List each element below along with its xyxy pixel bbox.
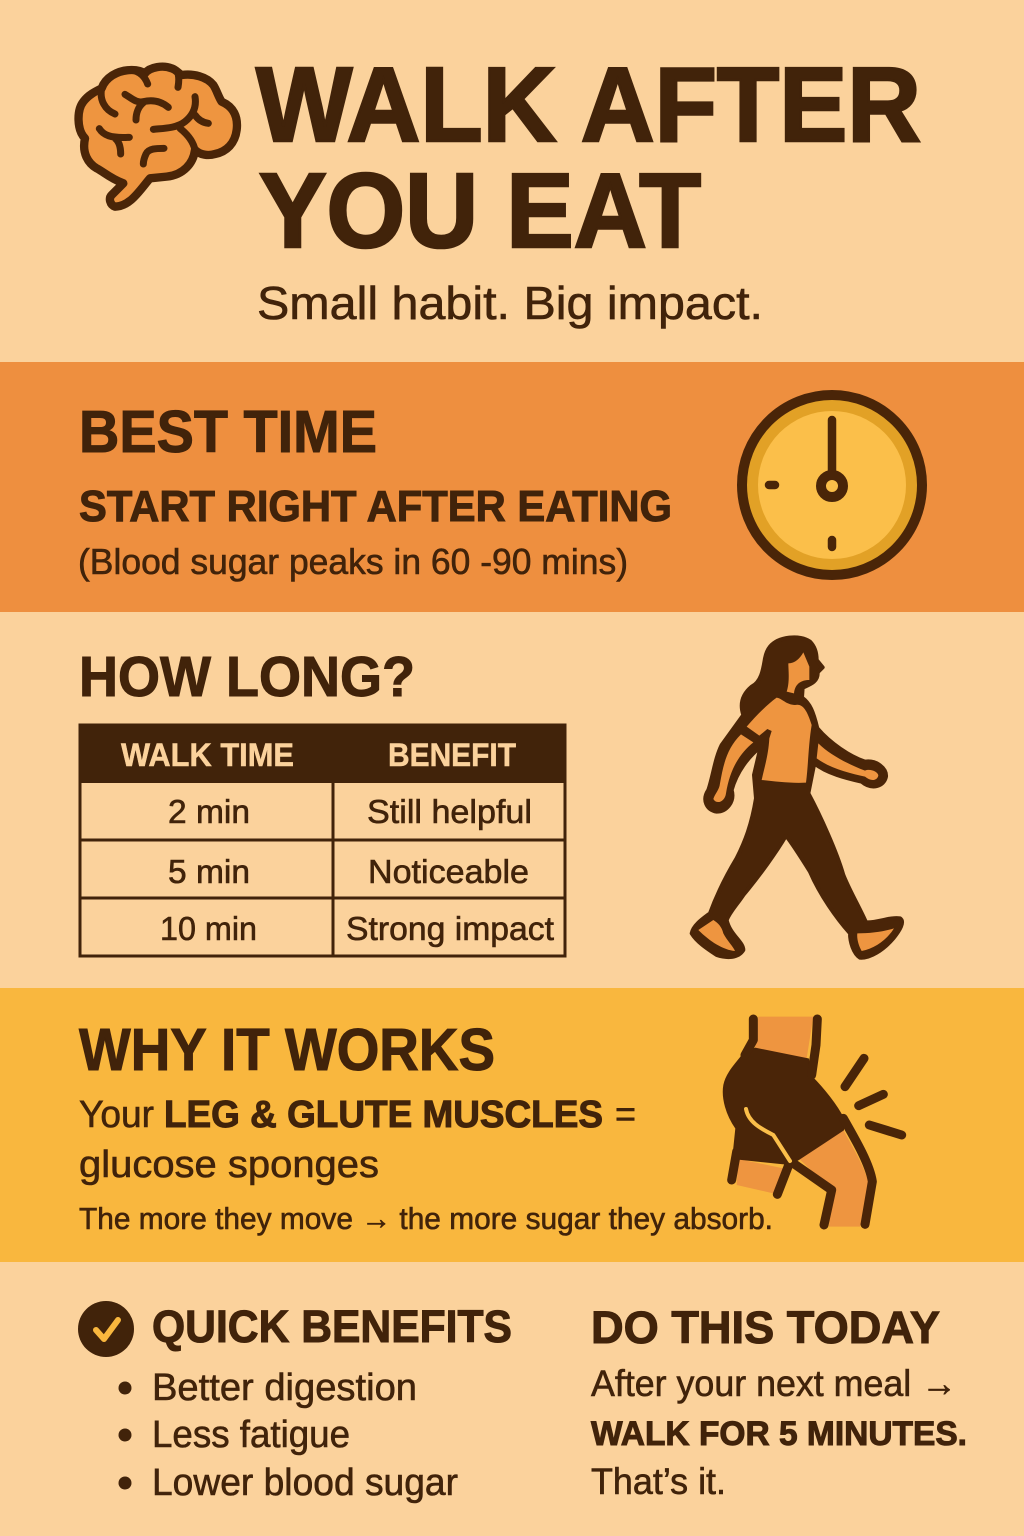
panel: best time	[0, 362, 1024, 612]
list: benefits: Better digestion	[152, 1367, 417, 1409]
heading: do this today: DO THIS TODAY	[591, 1302, 940, 1353]
table header: BENEFIT	[388, 737, 516, 773]
subtitle: Small habit. Big impact.	[257, 277, 763, 329]
text: muscles are glucose sponges: Your	[79, 1094, 154, 1136]
text: muscles are glucose sponges: LEG & GLUTE MUSCLES	[164, 1094, 603, 1136]
text: muscles are glucose sponges: =	[615, 1094, 636, 1136]
list: benefits: Lower blood sugar	[152, 1462, 458, 1504]
text: call to action	[591, 1363, 967, 1502]
icon: walking woman	[692, 637, 902, 958]
row: 2 min: Still helpful	[367, 793, 532, 830]
panel: why it works	[0, 988, 1024, 1262]
text: call to action: After your next meal →	[591, 1363, 957, 1404]
row: 5 min: Noticeable	[368, 853, 529, 890]
table header: WALK TIME	[121, 737, 294, 773]
panel: quick benefits	[78, 1301, 512, 1504]
header	[79, 46, 921, 329]
title	[256, 46, 921, 270]
row: 2 min: 2 min	[168, 793, 250, 830]
text: the more they move: The more they move → the more sugar they absorb.	[79, 1201, 773, 1236]
text: start right after eating: START RIGHT AFTER EATING	[79, 482, 672, 531]
row: 10 min: 10 min	[160, 910, 257, 947]
row: 10 min: Strong impact	[346, 910, 554, 947]
row: 10 min	[160, 910, 554, 947]
row: 5 min	[168, 853, 529, 890]
text: call to action: WALK FOR 5 MINUTES.	[591, 1415, 967, 1453]
row: 5 min: 5 min	[168, 853, 250, 890]
icon: clock	[742, 395, 922, 575]
text: call to action: That’s it.	[591, 1461, 726, 1502]
text: blood sugar note: (Blood sugar peaks in 60 -90 mins)	[78, 541, 628, 582]
heading: quick benefits: QUICK BENEFITS	[152, 1301, 512, 1352]
text: muscles are glucose sponges: glucose sponges	[79, 1144, 379, 1186]
title: WALK AFTER	[256, 46, 921, 164]
text: muscles are glucose sponges	[79, 1094, 636, 1186]
table: walk time and benefit	[79, 724, 566, 957]
icon: check badge	[78, 1301, 134, 1357]
panel: do this today	[591, 1302, 967, 1502]
heading: why it works: WHY IT WORKS	[79, 1017, 495, 1083]
list: benefits: Less fatigue	[152, 1414, 350, 1456]
row: 2 min	[168, 793, 532, 830]
heading: how long: HOW LONG?	[79, 645, 415, 709]
title: YOU EAT	[259, 152, 701, 270]
list: benefits	[118, 1367, 458, 1504]
icon: brain	[79, 67, 237, 207]
icon: glute and leg muscles	[723, 1017, 902, 1227]
panel: how long	[79, 637, 902, 958]
heading: best time: BEST TIME	[79, 399, 377, 465]
table header	[121, 737, 516, 773]
